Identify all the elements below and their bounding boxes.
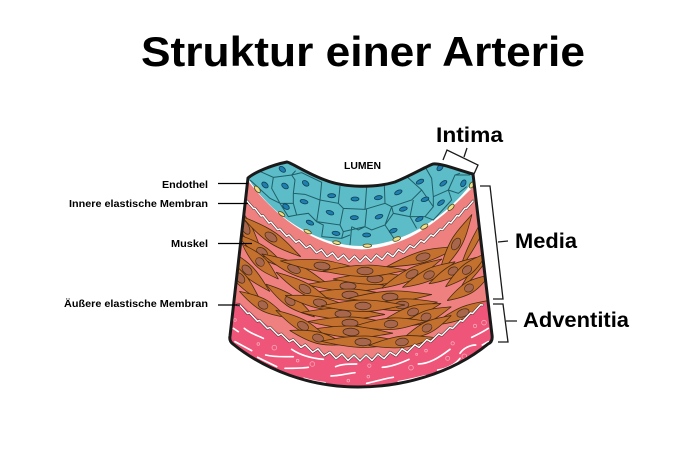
label: Äußere elastische Membran: Äußere elastische Membran [64,297,208,310]
internal elastic membrane [247,201,473,262]
intima layer [245,160,478,249]
bracket: Media [480,186,577,299]
panel: media layer [235,182,487,358]
bracket: Adventitia: Adventitia [523,309,629,332]
endothelial cells [245,160,478,246]
label: Muskel [171,239,252,250]
smooth muscle cells [238,214,487,348]
title: Struktur einer Arterie [141,28,585,75]
artery outline [230,162,492,387]
bracket: Intima [436,124,503,174]
label: Muskel: Muskel [171,239,208,250]
external elastic membrane [237,305,483,361]
label: lumen: LUMEN [344,161,381,172]
label: Innere elastische Membran: Innere elastische Membran [69,199,208,210]
bracket: Intima: Intima [436,124,503,147]
label: Endothel: Endothel [162,180,208,191]
connective tissue fibres [233,319,488,383]
yellow intimal cells [253,181,475,247]
bracket: Adventitia [493,304,629,342]
label: Endothel [162,180,248,191]
panel: adventitia layer [231,302,491,386]
white subendothelial band [249,180,472,250]
artery cross-section diagram [228,160,494,388]
bracket: Media: Media [515,230,577,253]
